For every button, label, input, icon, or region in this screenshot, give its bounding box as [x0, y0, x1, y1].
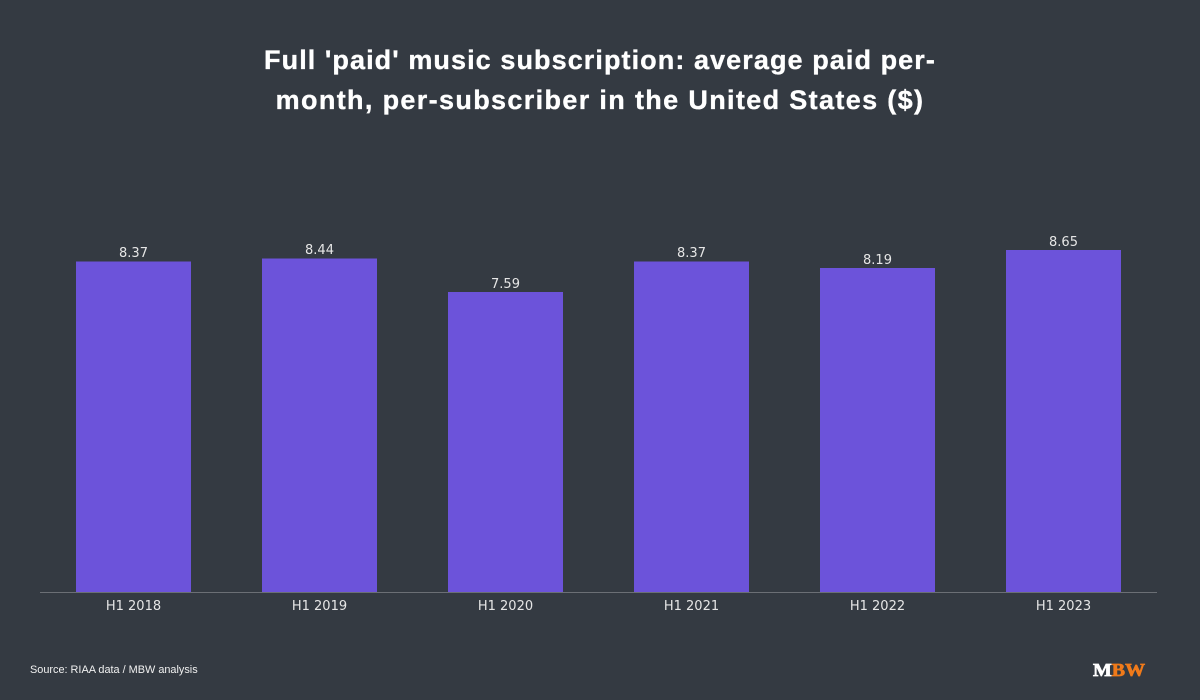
- bar: H1 2020: H1 2020: [478, 599, 533, 614]
- bar: H1 2020: 7.59: [491, 277, 520, 292]
- bar: H1 2023: [1006, 235, 1121, 614]
- bar: H1 2022: 8.19: [863, 253, 892, 268]
- bar: H1 2022: [820, 253, 935, 614]
- bar: H1 2018: H1 2018: [106, 599, 161, 614]
- bar: H1 2021: 8.37: [677, 246, 706, 261]
- bar: H1 2019: H1 2019: [292, 599, 347, 614]
- title: Full 'paid' music subscription: average paid per-: [264, 45, 936, 75]
- bar: H1 2018: [76, 246, 191, 614]
- bar: H1 2021: [634, 246, 749, 614]
- bar: H1 2019: 8.44: [305, 243, 334, 258]
- bar: H1 2021: H1 2021: [664, 599, 719, 614]
- bar: H1 2019: [262, 243, 377, 614]
- bar: H1 2020: [448, 277, 563, 614]
- source note: Source: RIAA data / MBW analysis: [30, 664, 198, 676]
- bar: H1 2022: H1 2022: [850, 599, 905, 614]
- bar: H1 2023: 8.65: [1049, 235, 1078, 250]
- logo: MBW: MBW: [1093, 660, 1145, 680]
- x axis line: [40, 592, 1157, 593]
- bar chart: [40, 235, 1157, 614]
- title: month, per-subscriber in the United States ($): [276, 85, 924, 115]
- title: [264, 45, 936, 115]
- bar: H1 2023: H1 2023: [1036, 599, 1091, 614]
- bar: H1 2018: 8.37: [119, 246, 148, 261]
